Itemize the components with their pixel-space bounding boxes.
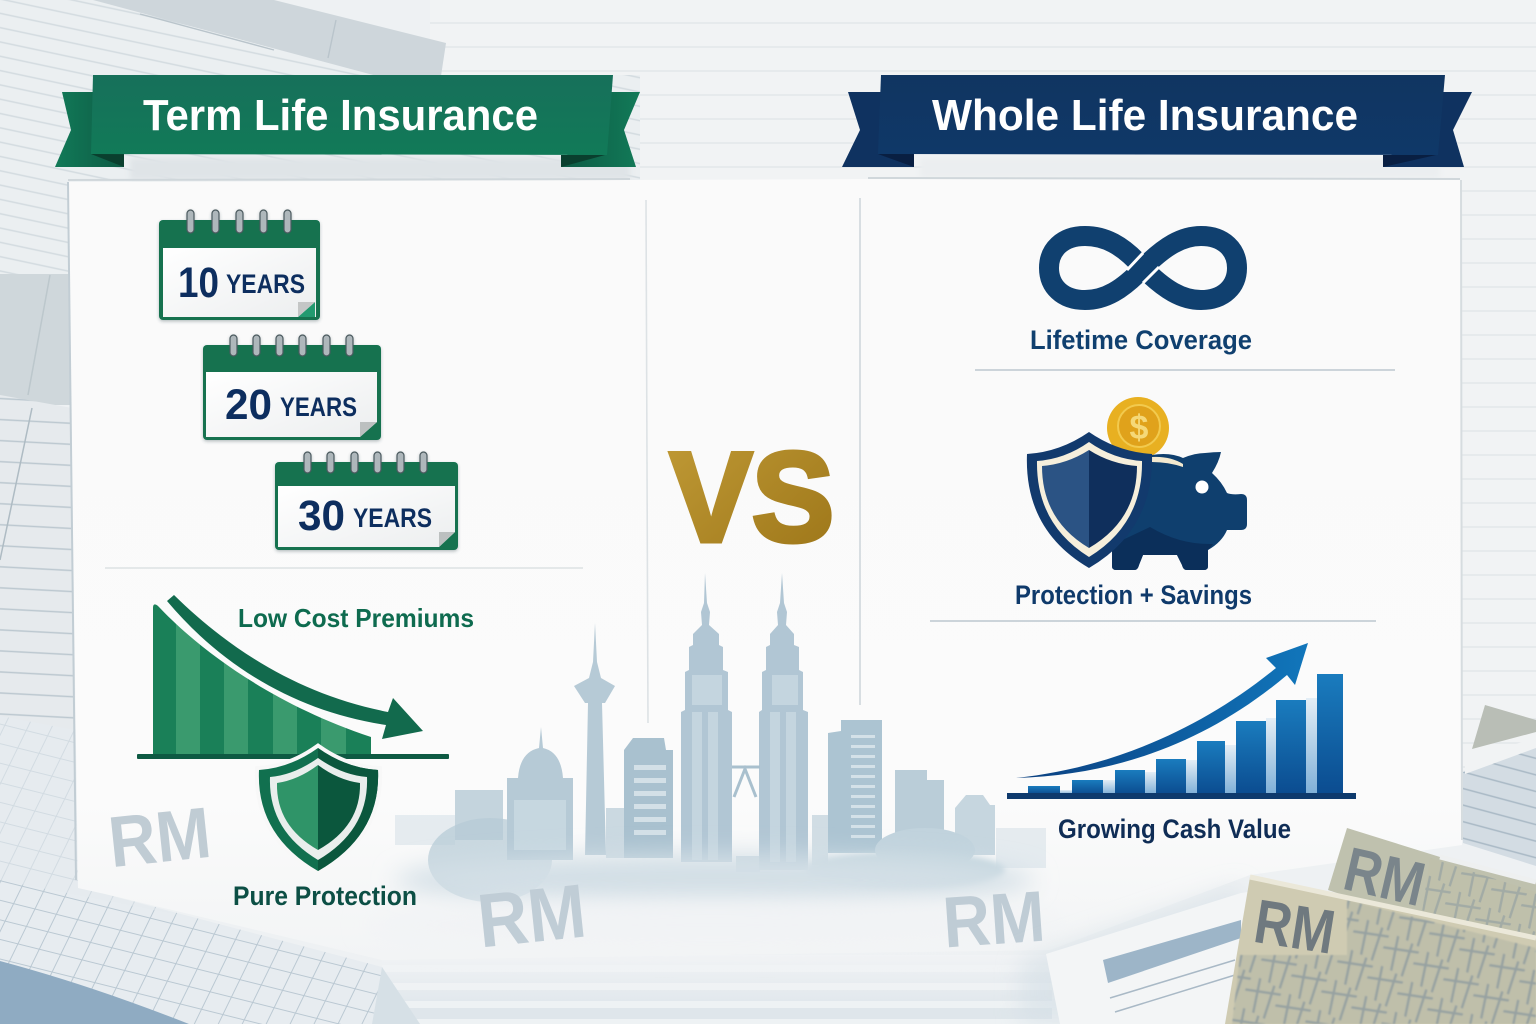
fog	[365, 854, 1065, 949]
watermark: RM left: RM	[105, 793, 215, 883]
watermark: RM centre: RM	[474, 869, 590, 964]
text: Lifetime Coverage: Lifetime Coverage	[1030, 325, 1252, 355]
background: banknotes and documents	[1020, 705, 1536, 1024]
background: banknotes and documents: RM	[1250, 887, 1340, 968]
calendar: 20 years	[203, 335, 381, 440]
calendar: 10 years: 10	[178, 259, 219, 307]
heading: Whole Life Insurance: Whole Life Insurance	[932, 91, 1358, 140]
icon: shield and piggy bank: $	[1130, 409, 1149, 447]
text: Protection + Savings: Protection + Savings	[1015, 580, 1252, 610]
icon: green shield	[259, 748, 378, 871]
panel: comparison sheet	[68, 178, 1462, 960]
calendar: 30 years: YEARS	[353, 503, 432, 533]
calendar: 10 years	[159, 210, 320, 320]
heading: Term Life Insurance: Term Life Insurance	[143, 91, 538, 140]
chart: declining premiums	[137, 595, 449, 760]
calendar: 20 years: YEARS	[280, 392, 357, 422]
banner: Term Life Insurance	[55, 75, 640, 167]
text: VS: VS	[670, 426, 834, 568]
banner: Whole Life Insurance	[842, 75, 1472, 167]
calendar: 10 years: YEARS	[226, 269, 305, 299]
text: Growing Cash Value: Growing Cash Value	[1058, 814, 1291, 844]
watermark: RM right: RM	[940, 877, 1048, 963]
icon: infinity	[1049, 236, 1237, 300]
illustration: Kuala Lumpur skyline	[395, 573, 1046, 902]
text: Low Cost Premiums: Low Cost Premiums	[238, 603, 474, 633]
calendar: 30 years	[275, 452, 458, 550]
icon: shield and piggy bank	[1027, 397, 1247, 570]
text: Pure Protection: Pure Protection	[233, 881, 417, 911]
chart: growing cash value	[1007, 643, 1356, 799]
calendar: 30 years: 30	[298, 492, 345, 540]
calendar: 20 years: 20	[225, 381, 272, 429]
background: banknotes and documents: RM	[1338, 835, 1431, 920]
